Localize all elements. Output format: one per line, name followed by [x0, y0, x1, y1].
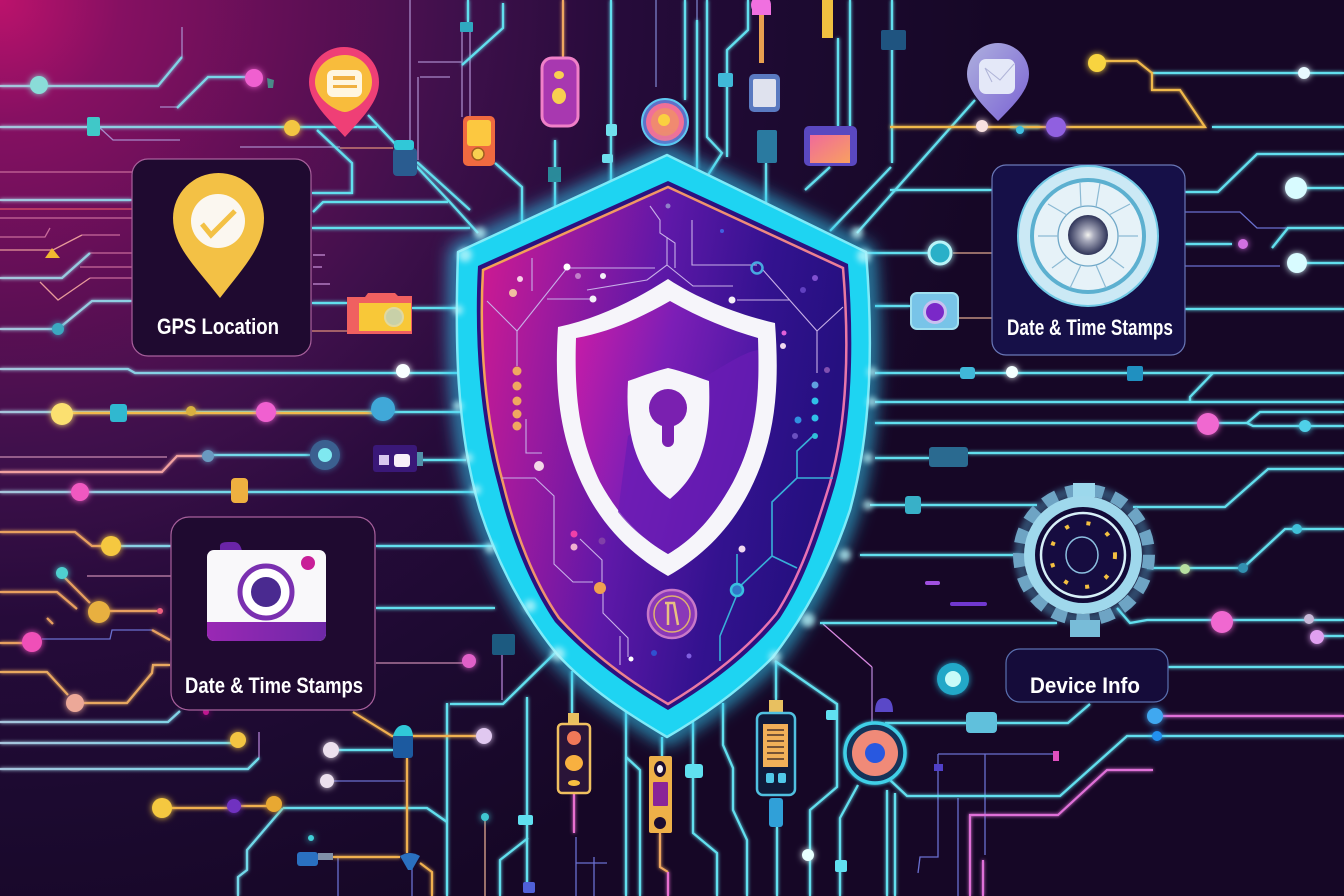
shield glow nodes	[453, 227, 877, 663]
inner shield circuit details	[487, 206, 843, 665]
icon: top location pin	[309, 47, 379, 137]
icon: camera	[207, 542, 326, 641]
central shield	[453, 155, 877, 737]
bottom device icons	[558, 700, 905, 833]
panel: Date & Time Stamps camera	[171, 517, 375, 710]
inner shield dots	[509, 204, 830, 662]
shield cyan border	[457, 155, 870, 737]
purple inner field	[576, 301, 758, 554]
label: Device Info: Device Info	[1030, 673, 1140, 698]
circuit traces: cyan left	[0, 0, 975, 896]
icon: gear	[1019, 483, 1149, 637]
top device icons	[463, 0, 857, 166]
panel: Date & Time Stamps top right	[992, 165, 1185, 355]
shield outer glow	[457, 155, 870, 737]
label: Date & Time Stamps: Date & Time Stamps	[185, 673, 363, 698]
icon: coin	[648, 590, 696, 638]
purple highlight	[618, 350, 758, 554]
inner cyan circuit	[720, 436, 833, 661]
icon: dial	[1018, 166, 1158, 306]
label: GPS Location: GPS Location	[157, 314, 279, 339]
icon: keyhole shield	[627, 368, 709, 499]
white inner shield	[557, 279, 777, 576]
panel: Device Info	[1006, 649, 1168, 702]
shield inner panel	[482, 187, 846, 704]
shield dark band	[477, 181, 851, 710]
circuit traces: cyan right	[820, 73, 1344, 796]
label: Date & Time Stamps: Date & Time Stamps	[1007, 315, 1173, 340]
icon: yellow pin with check	[173, 173, 264, 298]
icon: top right mail pin	[967, 43, 1029, 121]
side device icons	[347, 293, 958, 472]
panel: GPS Location	[132, 159, 311, 356]
